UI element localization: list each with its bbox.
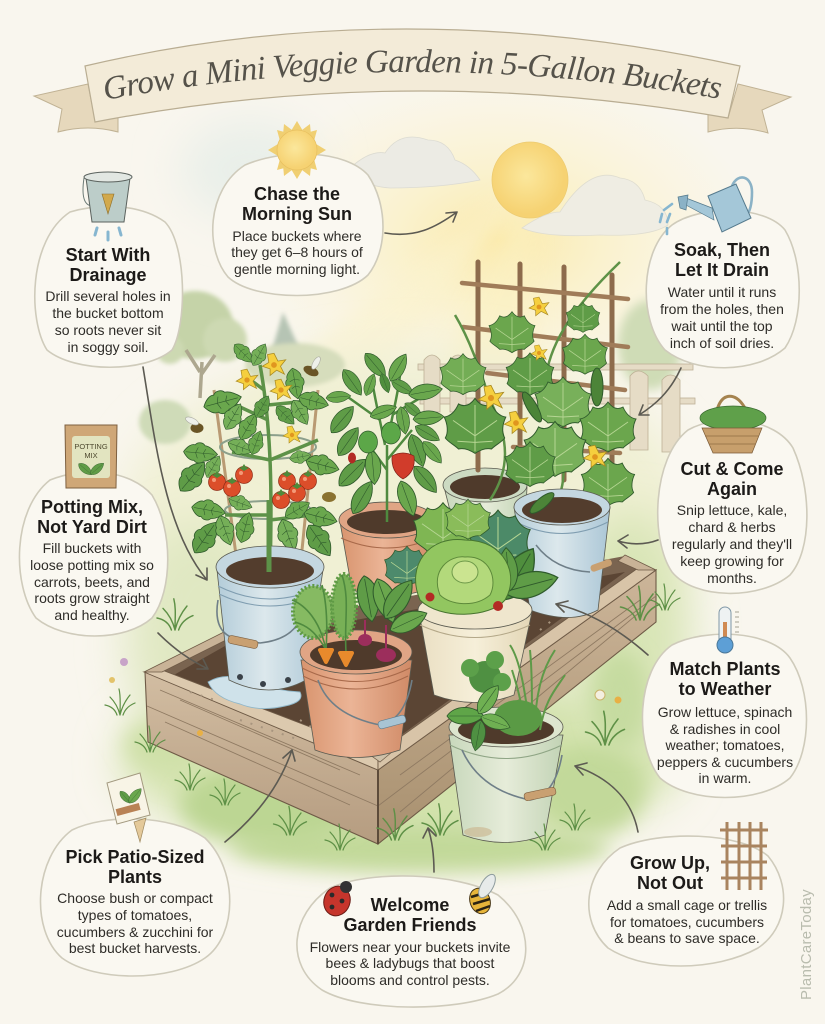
arrow: chase the sun (385, 212, 457, 234)
body text: best bucket harvests. (69, 940, 201, 956)
heading: Garden Friends (343, 915, 477, 935)
body text: carrots, beets, and (34, 574, 150, 590)
body text: Fill buckets with (43, 540, 141, 556)
body text: inch of soil dries. (670, 335, 774, 351)
heading: Match Plants (669, 659, 781, 679)
heading: Grow Up, (630, 853, 710, 873)
arrow: soak (639, 368, 681, 415)
banner ribbon (85, 29, 740, 122)
arrow: patio plants (225, 750, 295, 842)
tomato plant with cage (172, 339, 342, 572)
body text: & radishes in cool (670, 721, 780, 737)
body text: Add a small cage or trellis (607, 897, 767, 913)
body text: and healthy. (54, 607, 130, 623)
body text: from the holes, then (660, 301, 784, 317)
terracotta bucket with carrots and beets (292, 574, 431, 758)
watermark: PlantCareToday (798, 889, 815, 1000)
arrow: grow up (575, 763, 638, 832)
heading: Morning Sun (242, 204, 352, 224)
icon: basket of greens (700, 396, 766, 453)
body text: regularly and they'll (672, 536, 792, 552)
body text: & beans to save space. (614, 930, 760, 946)
water puddle (208, 676, 301, 709)
panel: welcome garden friends (297, 872, 526, 1007)
body text: weather; tomatoes, (664, 737, 785, 753)
icon: small sun (268, 121, 326, 179)
banner left tail (34, 84, 118, 132)
blue bucket with cucumber (514, 489, 613, 618)
body text: they get 6–8 hours of (231, 244, 363, 260)
body text: wait until the top (670, 318, 773, 334)
title text: Grow a Mini Veggie Garden in 5-Gallon Buckets (105, 49, 722, 99)
banner right tail (708, 84, 791, 133)
heading: Not Yard Dirt (37, 517, 147, 537)
arrow: potting mix (158, 633, 208, 669)
body text: roots grow straight (34, 590, 150, 606)
body text: chard & herbs (688, 519, 776, 535)
heading: Soak, Then (674, 240, 770, 260)
icon: bee (466, 872, 499, 917)
heading: Plants (108, 867, 162, 887)
wooden fence (418, 355, 695, 452)
arrow: match plants (556, 601, 648, 655)
panel: cut and come again (658, 396, 807, 593)
background trees (139, 291, 682, 444)
clouds (350, 137, 668, 236)
left blue bucket (216, 500, 324, 690)
terracotta back pot (339, 502, 435, 596)
heading: Potting Mix, (41, 497, 143, 517)
heading: Let It Drain (675, 260, 769, 280)
heading: Welcome (371, 895, 449, 915)
arrows (143, 212, 681, 872)
panel: start with drainage (35, 172, 182, 367)
body text: Place buckets where (232, 228, 362, 244)
body text: cucumbers & zucchini for (57, 924, 214, 940)
panel: match plants to weather (642, 607, 806, 798)
big sun (492, 142, 568, 218)
heading: to Weather (679, 679, 771, 699)
grass tufts (105, 584, 680, 850)
cucumber trellis (462, 262, 628, 500)
icon: potting mix bag: MIX (84, 451, 98, 460)
panel: pick patio-sized plants (40, 773, 230, 976)
icon: potting mix bag: POTTING (74, 442, 108, 451)
body text: in soggy soil. (68, 339, 148, 355)
heading: Drainage (69, 265, 147, 285)
body text: blooms and control pests. (330, 972, 490, 988)
body text: Choose bush or compact (57, 890, 213, 906)
raised garden bed (144, 555, 656, 844)
body text: months. (707, 570, 757, 586)
panel: soak then let it drain (646, 177, 799, 368)
icon: plant marker (107, 773, 150, 842)
heading: Cut & Come (680, 459, 784, 479)
arrow: cut and come again (618, 535, 658, 548)
body text: types of tomatoes, (78, 907, 192, 923)
body text: loose potting mix so (30, 557, 154, 573)
heading: Chase the (254, 184, 340, 204)
icon: ladybug (320, 881, 354, 920)
body text: keep growing for (680, 553, 784, 569)
panel: grow up not out (589, 822, 784, 966)
heading: Not Out (637, 873, 703, 893)
heading: Pick Patio-Sized (65, 847, 205, 867)
body text: the bucket bottom (52, 305, 164, 321)
body text: Flowers near your buckets invite (310, 939, 511, 955)
icon: potting mix bag (65, 425, 117, 488)
salad greens and cream bucket (385, 499, 561, 702)
panel: potting mix (19, 425, 168, 636)
body text: peppers & cucumbers (657, 754, 793, 770)
title banner (32, 28, 792, 134)
heading: Start With (66, 245, 150, 265)
body text: Water until it runs (668, 284, 776, 300)
pepper plant (325, 349, 446, 522)
cucumber vine (440, 262, 636, 506)
garden scene backdrop (120, 70, 760, 872)
icon: bucket with drill (83, 172, 132, 240)
arrow: garden friends (423, 828, 436, 872)
body text: gentle morning light. (234, 261, 360, 277)
sage back bucket (443, 468, 527, 530)
body text: Snip lettuce, kale, (677, 502, 787, 518)
body text: in warm. (699, 770, 751, 786)
panel: chase the morning sun (213, 121, 383, 296)
icon: mini trellis (720, 822, 768, 890)
arrow: drainage (143, 367, 207, 580)
body text: bees & ladybugs that boost (326, 955, 495, 971)
icon: watering can (660, 177, 752, 234)
body text: so roots never sit (55, 322, 161, 338)
heading: Again (707, 479, 757, 499)
icon: thermometer (717, 607, 739, 653)
bees around the plants (184, 355, 336, 502)
body text: Drill several holes in (45, 288, 171, 304)
body text: Grow lettuce, spinach (658, 704, 792, 720)
sage bucket with herbs (447, 645, 565, 842)
body text: for tomatoes, cucumbers (610, 914, 764, 930)
